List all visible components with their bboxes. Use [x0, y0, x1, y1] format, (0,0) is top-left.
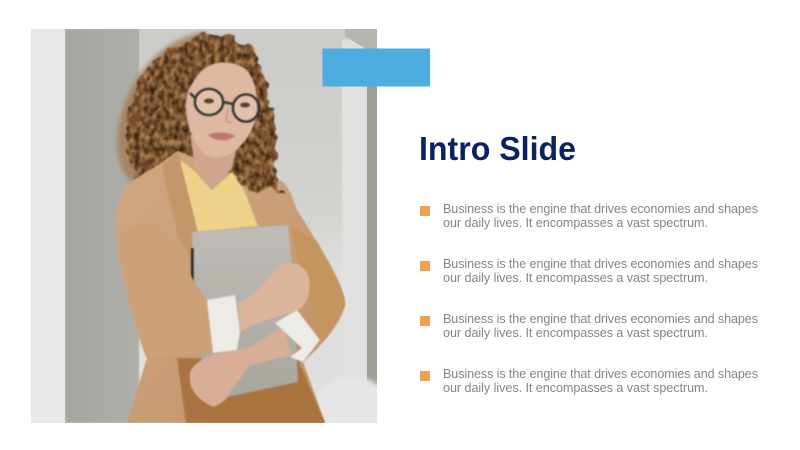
- text 3: [443, 312, 758, 340]
- text 3: our daily lives. It encompasses a vast spectrum.: [443, 326, 708, 340]
- text 2: [443, 257, 758, 285]
- bullet 3: [420, 316, 430, 326]
- accent: blue rectangle: [322, 48, 430, 86]
- laptop: [191, 225, 298, 398]
- bullet 4: [420, 371, 430, 381]
- text 3: Business is the engine that drives economies and shapes: [443, 312, 758, 326]
- jacket sleeve: [116, 236, 214, 358]
- text 1: [443, 202, 758, 230]
- bullet 2: [420, 261, 430, 271]
- slide canvas: [31, 29, 758, 423]
- text 4: Business is the engine that drives economies and shapes: [443, 367, 758, 381]
- blazer: [115, 151, 345, 423]
- list item 1: [420, 202, 758, 230]
- blazer lapel: [162, 151, 197, 262]
- title: Intro Slide: [419, 130, 576, 167]
- face: [186, 63, 257, 158]
- neck: [190, 135, 238, 190]
- text 4: our daily lives. It encompasses a vast spectrum.: [443, 381, 708, 395]
- hair: [125, 33, 276, 194]
- upper forearm and hand: [238, 263, 310, 332]
- list item 4: [420, 367, 758, 395]
- list item 2: [420, 257, 758, 285]
- white cuff left: [207, 295, 240, 353]
- text 1: Business is the engine that drives economies and shapes: [443, 202, 758, 216]
- yellow shirt: [180, 160, 258, 232]
- text 2: Business is the engine that drives economies and shapes: [443, 257, 758, 271]
- text 2: our daily lives. It encompasses a vast spectrum.: [443, 271, 708, 285]
- trousers: [177, 358, 325, 423]
- text 1: our daily lives. It encompasses a vast spectrum.: [443, 216, 708, 230]
- hair frizz halo: [117, 32, 205, 185]
- white cuff right: [275, 310, 320, 362]
- lower forearm and hand: [190, 327, 292, 407]
- bullet 1: [420, 206, 430, 216]
- list item 3: [420, 312, 758, 340]
- glasses: [190, 89, 259, 122]
- eyes, nose and lips: [204, 98, 250, 140]
- text 4: [443, 367, 758, 395]
- photo: woman holding a laptop: [31, 29, 377, 423]
- photo background wall: [31, 29, 377, 423]
- right jacket sleeve: [290, 225, 345, 342]
- hair over right shoulder: [232, 150, 282, 192]
